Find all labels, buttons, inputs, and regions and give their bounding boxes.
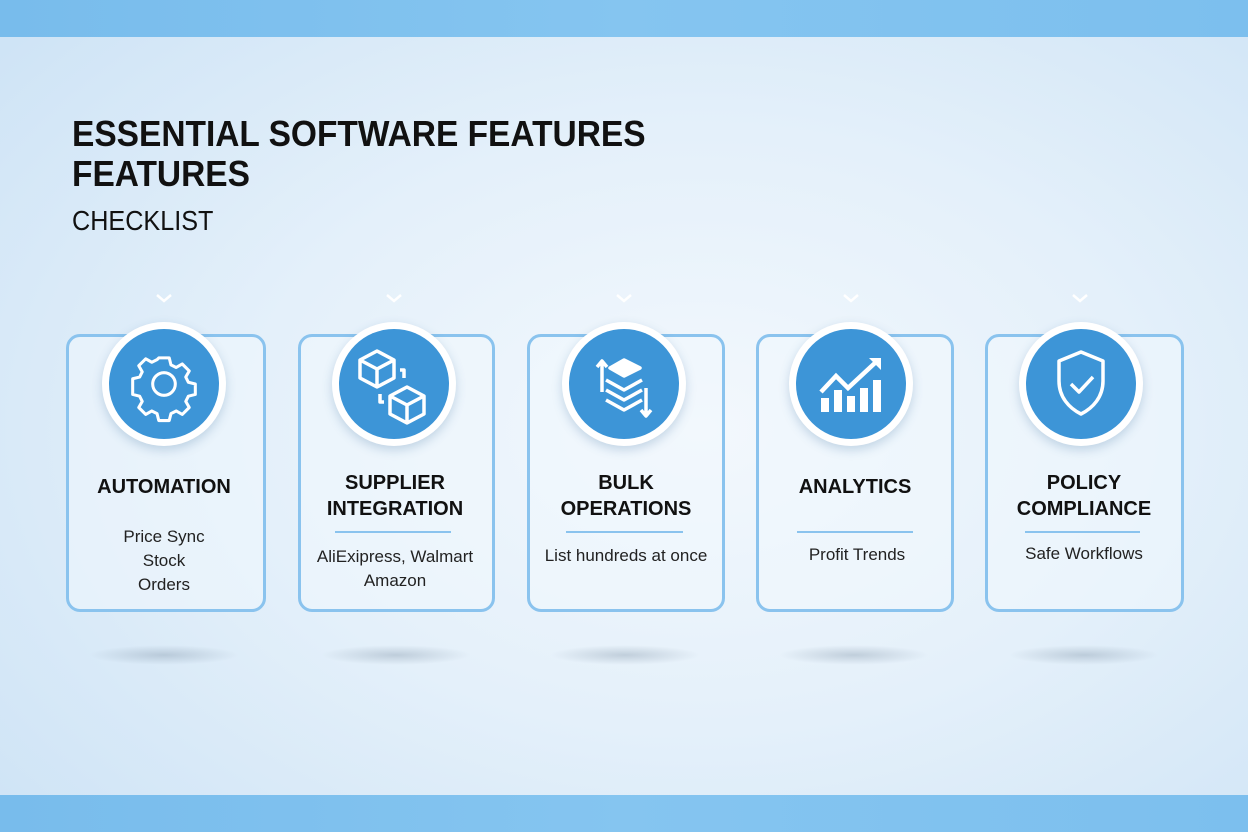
icon: gear: [102, 322, 226, 446]
panel: supplier integration: [298, 334, 495, 612]
heading: bulk operations: [561, 472, 691, 520]
text: supplier integration: [317, 547, 473, 590]
text: supplier integration: Amazon: [364, 571, 426, 590]
heading: supplier integration: [327, 472, 463, 520]
heading: analytics: ANALYTICS: [799, 476, 911, 498]
icon: bar chart: [789, 322, 913, 446]
panel: bulk operations: [527, 334, 725, 612]
title: ESSENTIAL SOFTWARE FEATURES: [72, 113, 646, 154]
heading: bulk operations: OPERATIONS: [561, 498, 691, 520]
heading: automation: AUTOMATION: [97, 476, 231, 498]
text: automation: Price Sync: [123, 527, 205, 546]
heading: policy compliance: COMPLIANCE: [1017, 498, 1151, 520]
heading: bulk operations: BULK: [598, 472, 654, 494]
icon: boxes: [332, 322, 456, 446]
heading: policy compliance: [1017, 472, 1151, 520]
text: supplier integration: AliExipress, Walmart: [317, 547, 473, 566]
panel: policy compliance: [985, 334, 1184, 612]
panel: automation: [66, 334, 266, 612]
icon: stacked layers: [562, 322, 686, 446]
text: bulk operations: List hundreds at once: [545, 546, 707, 565]
heading: policy compliance: POLICY: [1047, 472, 1121, 494]
text: policy compliance: Safe Workflows: [1025, 544, 1143, 563]
title: FEATURES: [72, 153, 250, 194]
heading: supplier integration: INTEGRATION: [327, 498, 463, 520]
text: analytics: Profit Trends: [809, 545, 905, 564]
icon: shield: [1019, 322, 1143, 446]
text: automation: Orders: [138, 575, 190, 594]
heading: supplier integration: SUPPLIER: [345, 472, 445, 494]
text: automation: [123, 527, 205, 594]
chevrons: [156, 294, 1088, 302]
title: [72, 113, 646, 194]
text: automation: Stock: [143, 551, 185, 570]
panel: analytics: [756, 334, 954, 612]
subtitle: CHECKLIST: [72, 205, 213, 236]
